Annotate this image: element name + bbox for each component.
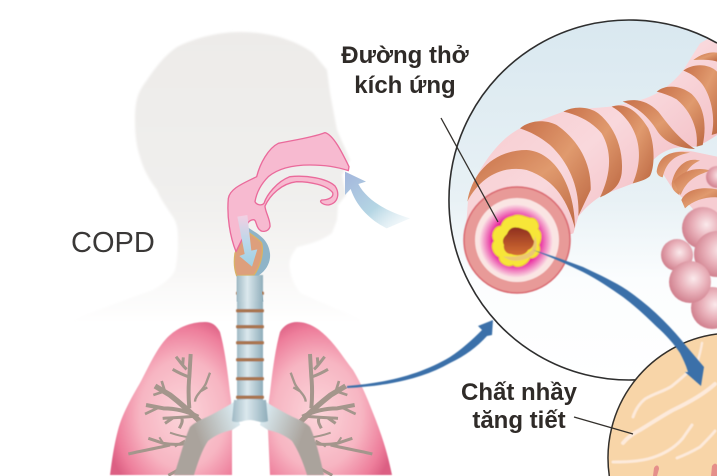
label: increased mucus: tăng tiết — [472, 407, 566, 434]
right bronchial tree — [291, 354, 372, 475]
arrow: airway to mucus — [533, 250, 704, 386]
airflow arrow at nose — [345, 172, 410, 228]
nasal and throat airway — [228, 133, 410, 302]
label: irritated airway: Đường thở — [341, 42, 470, 69]
left bronchus — [174, 402, 240, 475]
label: increased mucus: Chất nhầy — [461, 379, 578, 406]
larynx — [238, 227, 270, 278]
head and body silhouette — [60, 32, 375, 325]
tracheal rings — [236, 292, 264, 399]
mucus streaks — [613, 343, 715, 462]
leader line: mucus — [574, 417, 633, 434]
trachea — [232, 275, 268, 422]
arrow: lung to airway — [347, 320, 493, 388]
leader line: irritated airway — [441, 118, 498, 222]
small bronchiole branch — [658, 151, 717, 213]
right lung — [268, 322, 392, 475]
left bronchial tree — [128, 354, 210, 475]
cartilage bands — [467, 150, 575, 228]
right bronchus — [260, 402, 324, 475]
pink airway — [228, 133, 349, 252]
panel: magnified airway circle — [449, 20, 717, 380]
label: irritated airway — [341, 42, 470, 99]
panel: mucus circle — [608, 334, 717, 476]
left lung — [110, 322, 232, 475]
label: increased mucus — [461, 379, 578, 434]
airway illustration — [464, 33, 717, 329]
alveoli cluster — [661, 166, 717, 329]
mucus cell details — [653, 465, 659, 476]
label: irritated airway: kích ứng — [354, 72, 456, 99]
lungs — [110, 322, 392, 475]
main bronchus tube — [466, 39, 717, 234]
airway cross-section — [464, 187, 570, 293]
label: COPD: COPD — [71, 227, 155, 259]
airflow arrow in throat — [237, 215, 257, 267]
